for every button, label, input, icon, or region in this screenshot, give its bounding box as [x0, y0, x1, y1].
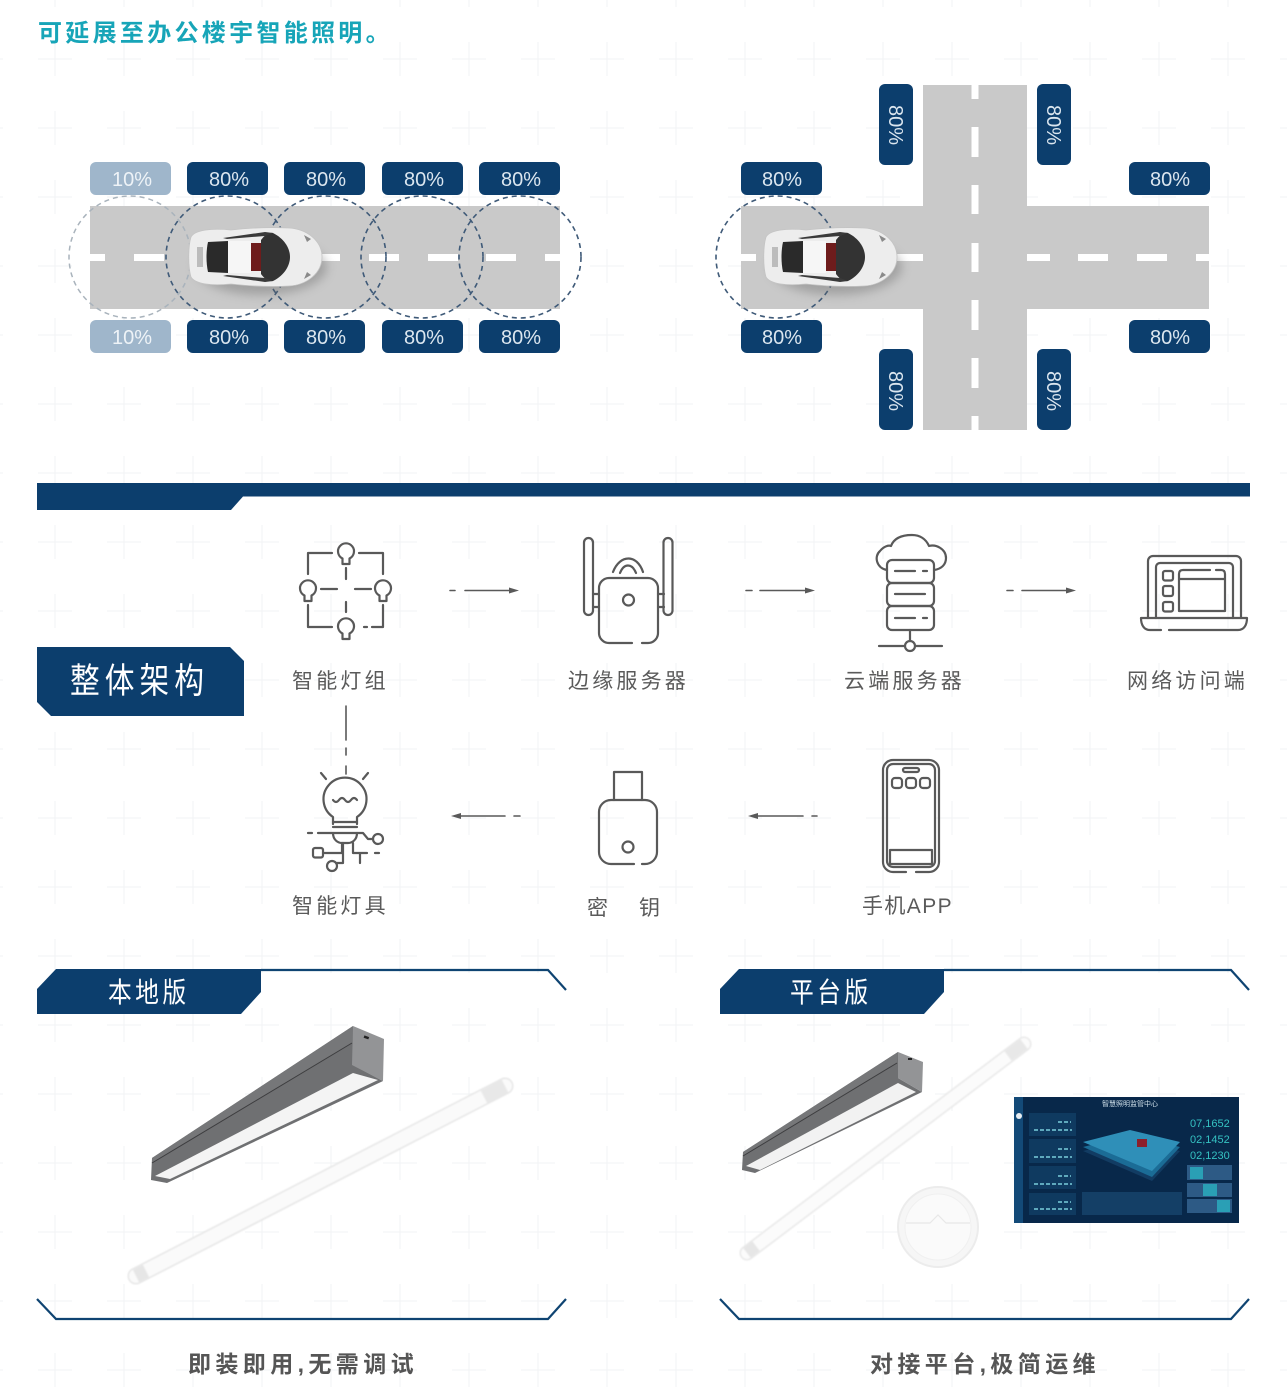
heading tag: local edition	[37, 969, 261, 1014]
brightness labels bottom row: 80%	[306, 327, 346, 349]
brightness labels top row: 80%	[306, 169, 346, 191]
panel: straight road lighting diagram	[69, 162, 581, 353]
brightness labels horizontal: 80%	[762, 169, 802, 191]
brightness labels top row: 80%	[501, 169, 541, 191]
dashboard screenshot	[1014, 1097, 1239, 1223]
heading: overall architecture	[37, 647, 244, 716]
product: round sensor	[898, 1187, 978, 1267]
sensor range circle	[716, 196, 838, 318]
brightness labels horizontal: 80%	[1150, 327, 1190, 349]
icon: key	[599, 772, 657, 864]
caption: 对接平台,极简运维	[870, 1351, 1100, 1377]
label: key: 钥	[639, 897, 660, 920]
brightness labels vertical: 80%	[884, 105, 906, 145]
road	[90, 206, 560, 309]
icon: phone	[883, 760, 939, 872]
brightness labels vertical: 80%	[1042, 105, 1064, 145]
product: linear lamp	[151, 1026, 384, 1183]
brightness labels vertical	[879, 84, 1071, 430]
brightness labels horizontal: 80%	[762, 327, 802, 349]
sensor range circles	[69, 196, 581, 318]
label: phone app: 手机APP	[862, 895, 953, 918]
brightness labels bottom row	[90, 320, 560, 353]
icon: smart light group	[300, 543, 391, 639]
label: smart luminaire: 智能灯具	[292, 895, 389, 918]
brightness labels horizontal: 80%	[1150, 169, 1190, 191]
brightness labels top row: 10%	[112, 169, 152, 191]
brightness labels top row: 80%	[404, 169, 444, 191]
brightness labels bottom row: 80%	[501, 327, 541, 349]
icon: smart luminaire	[308, 773, 383, 871]
brightness labels vertical: 80%	[884, 371, 906, 411]
brightness labels top row	[90, 162, 560, 195]
label: cloud server: 云端服务器	[844, 670, 965, 693]
heading tag: local edition: 本地版	[108, 976, 190, 1008]
panel: architecture flow	[292, 535, 1248, 920]
icon: laptop	[1141, 556, 1247, 630]
icon: edge server	[584, 538, 672, 643]
label: web client: 网络访问端	[1127, 670, 1248, 693]
brightness labels vertical: 80%	[1042, 371, 1064, 411]
connector: light group to luminaire	[345, 706, 347, 774]
panel: platform edition	[720, 969, 1249, 1377]
icon: car	[764, 228, 902, 295]
arrow: to key	[748, 813, 817, 819]
label: smart light group: 智能灯组	[292, 670, 389, 693]
dashboard screenshot: 智慧照明监管中心	[1102, 1099, 1158, 1108]
dashboard screenshot: 02,1452	[1190, 1134, 1230, 1146]
panel: crossroad lighting diagram	[716, 84, 1210, 430]
icon: car	[189, 228, 327, 295]
brightness labels top row: 80%	[209, 169, 249, 191]
heading tag: platform edition: 平台版	[790, 976, 872, 1008]
panel: local edition	[37, 969, 566, 1377]
caption: 即装即用,无需调试	[188, 1351, 418, 1377]
brightness labels horizontal	[741, 162, 1210, 353]
heading tag: platform edition	[720, 969, 944, 1014]
arrow: to web client	[1007, 588, 1076, 594]
label: key: 密	[587, 897, 608, 920]
brightness labels bottom row: 10%	[112, 327, 152, 349]
brightness labels bottom row: 80%	[209, 327, 249, 349]
arrow: to edge server	[450, 588, 519, 594]
crossroad	[741, 85, 1209, 430]
dashboard screenshot: 07,1652	[1190, 1118, 1230, 1130]
dashboard screenshot: 02,1230	[1190, 1150, 1230, 1162]
heading: overall architecture: 整体架构	[70, 662, 209, 701]
label: edge server: 边缘服务器	[568, 670, 689, 693]
arrow: to luminaire	[451, 813, 520, 819]
frame	[37, 970, 566, 1319]
icon: cloud server	[877, 535, 946, 651]
product: linear lamp	[742, 1052, 923, 1173]
section divider band	[37, 483, 1250, 510]
arrow: to cloud server	[746, 588, 815, 594]
product: LED tube	[136, 1086, 505, 1276]
title: 可延展至办公楼宇智能照明。	[38, 20, 393, 47]
frame	[720, 970, 1249, 1319]
product: LED tube	[747, 1044, 1024, 1253]
brightness labels bottom row: 80%	[404, 327, 444, 349]
